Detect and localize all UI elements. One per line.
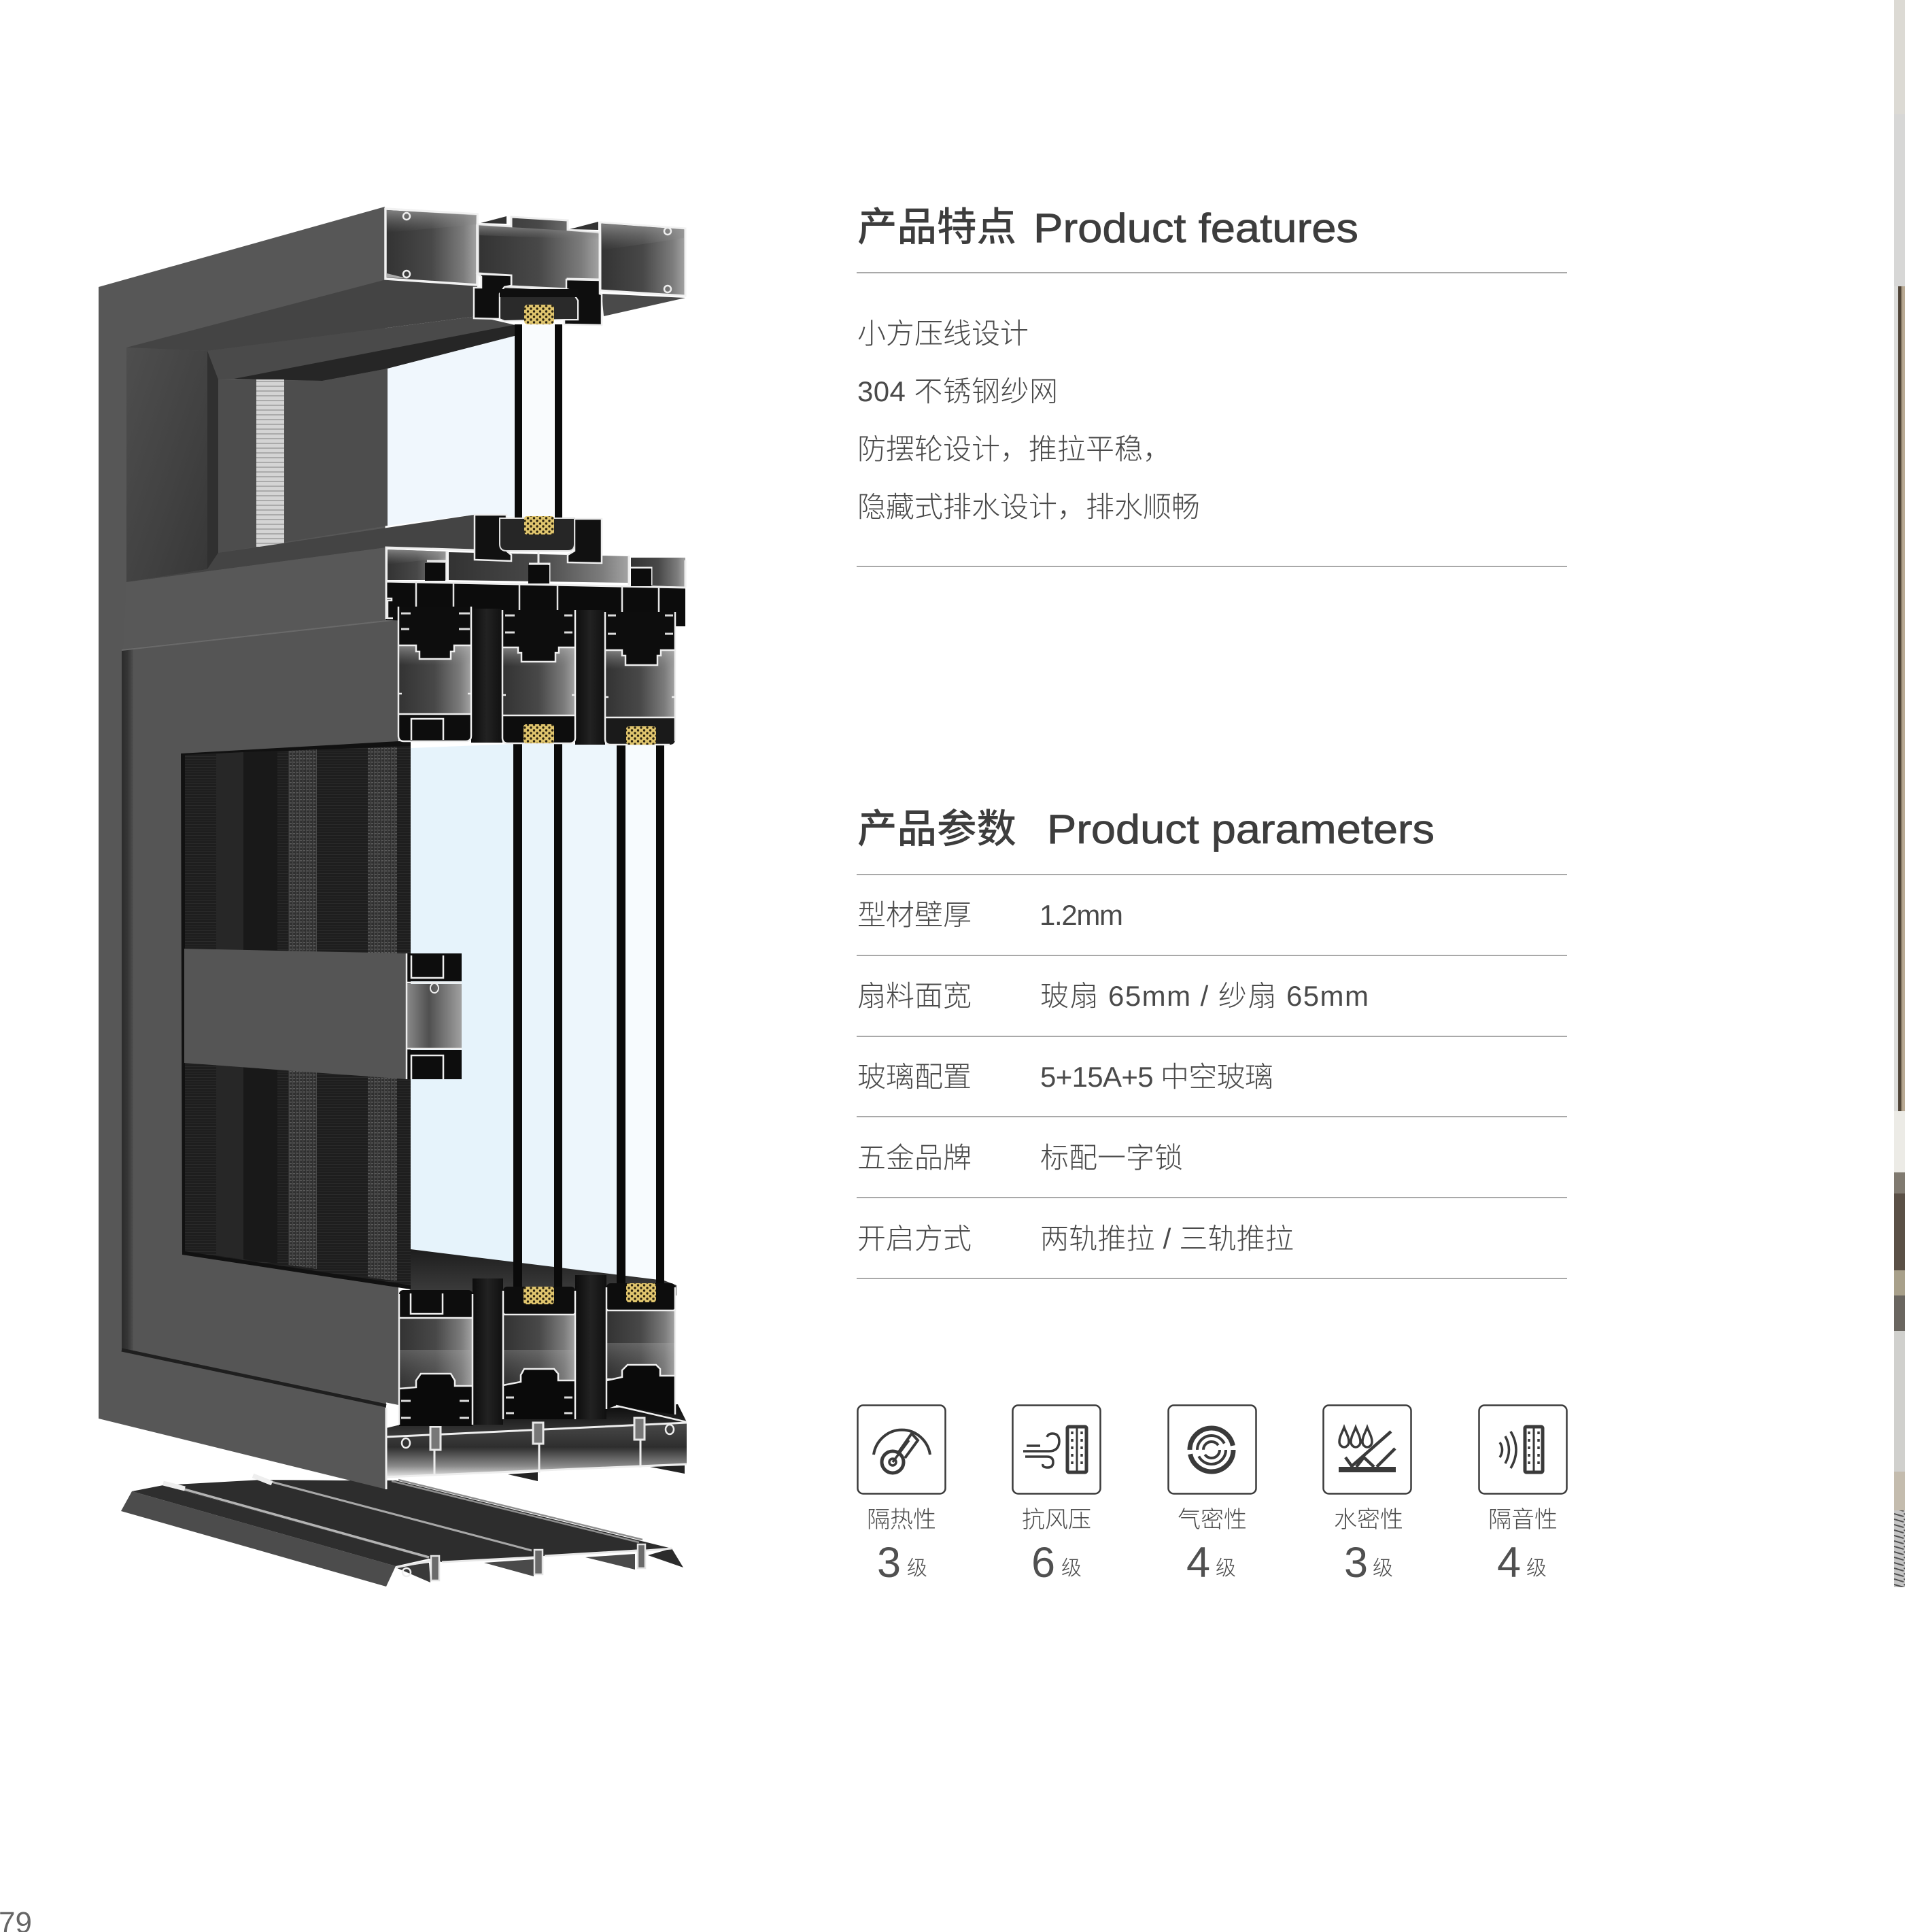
lower sash face and mid rail [122, 547, 398, 1406]
rating: water tightness [1323, 1405, 1411, 1587]
sash sections bottom [399, 1275, 687, 1426]
sash sections top [398, 607, 675, 745]
heading: product features [857, 194, 1358, 252]
feature list: 304 不锈钢纱网 [857, 375, 1058, 407]
rating: wind pressure: 级 [1061, 1557, 1082, 1580]
frame front face [99, 207, 386, 1489]
bottom track section [386, 1404, 687, 1489]
rating: air tightness [1168, 1405, 1256, 1587]
bottom sash section 1 [399, 1290, 473, 1426]
rating: air tightness: 级 [1216, 1557, 1236, 1580]
feature list: 隐藏式排水设计，排水顺畅 [857, 491, 1200, 523]
rating: sound insulation [1479, 1405, 1566, 1587]
rating: wind pressure: 抗风压 [1022, 1507, 1091, 1533]
upper glass panes edges [515, 324, 562, 518]
rating: thermal insulation: 3 [877, 1539, 901, 1587]
rating: wind pressure [1013, 1405, 1100, 1587]
icon: thermometer gauge [858, 1405, 945, 1493]
parameters table: 型材壁厚 [857, 899, 972, 931]
rating: wind pressure: 6 [1031, 1539, 1055, 1587]
insect screen [181, 741, 411, 1289]
middle interlock rail [184, 949, 462, 1079]
heading: product features: 产品特点 [857, 194, 1016, 252]
parameters table: 玻璃配置 [857, 1061, 972, 1093]
rating: sound insulation: 4 [1497, 1539, 1521, 1587]
parameters table: 1.2mm [1040, 899, 1123, 931]
feature list: 防摆轮设计，推拉平稳， [857, 433, 1171, 465]
sash section 3 [605, 612, 675, 745]
head section chambers [385, 209, 685, 325]
white mesh edge strip [256, 379, 284, 547]
parameters table [857, 874, 1567, 1279]
icon: water drops deflected by surface [1323, 1405, 1411, 1493]
parameters table: 开启方式 [857, 1223, 972, 1255]
heading: product parameters [857, 796, 1435, 854]
parameters table: 5+15A+5 中空玻璃 [1040, 1061, 1273, 1093]
upper opening recess [126, 279, 517, 582]
room photo strip at right edge [1894, 0, 1905, 1587]
rating: thermal insulation: 隔热性 [867, 1507, 936, 1533]
feature list: 小方压线设计 [857, 318, 1029, 350]
bottom sash section 3 [606, 1283, 687, 1422]
sash section 2 [502, 610, 575, 743]
parameters table: 玻扇 65mm / 纱扇 65mm [1040, 980, 1369, 1012]
mid track section [386, 515, 685, 626]
head sill shoes with glazing [475, 515, 602, 563]
icon: wind against panel [1013, 1405, 1100, 1493]
threshold cover profile [121, 1476, 683, 1587]
rating: water tightness: 级 [1373, 1557, 1393, 1580]
parameters table: 标配一字锁 [1040, 1142, 1183, 1174]
feature list [857, 318, 1200, 523]
rating: air tightness: 4 [1186, 1539, 1210, 1587]
lower glass [411, 744, 656, 1281]
parameters table: 两轨推拉 / 三轨推拉 [1040, 1223, 1294, 1255]
heading: product parameters: 产品参数 [857, 796, 1016, 854]
glass bottom track band [398, 1249, 676, 1295]
heading: product features: Product features [1033, 205, 1358, 251]
bottom sash section 2 [503, 1287, 575, 1419]
parameters table: 扇料面宽 [857, 980, 972, 1012]
lower glass panes edges [513, 741, 664, 1295]
rating: sound insulation: 级 [1526, 1557, 1547, 1580]
rating: thermal insulation [858, 1405, 945, 1587]
icon: concentric rings [1168, 1405, 1256, 1493]
rating: thermal insulation: 级 [907, 1557, 927, 1580]
heading: product parameters: Product parameters [1047, 807, 1435, 852]
rating: water tightness: 水密性 [1334, 1507, 1403, 1533]
product cutaway: sliding window section [99, 207, 687, 1587]
rating: water tightness: 3 [1344, 1539, 1368, 1587]
rating: sound insulation: 隔音性 [1488, 1507, 1558, 1533]
upper glass [388, 325, 554, 526]
rating: air tightness: 气密性 [1178, 1507, 1247, 1533]
parameters table: 五金品牌 [857, 1142, 972, 1174]
icon: sound waves against panel [1479, 1405, 1566, 1493]
sash section 1 [398, 607, 471, 741]
